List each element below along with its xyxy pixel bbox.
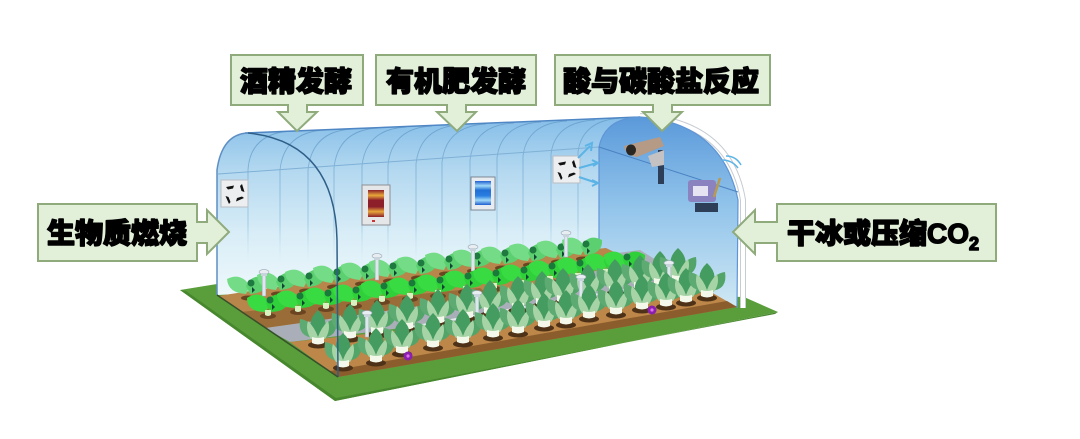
back row of bright plants xyxy=(227,238,602,300)
callout: acid and carbonate reaction xyxy=(555,55,770,131)
front row of pale plants xyxy=(325,263,725,372)
icon: wireless sensor xyxy=(688,156,741,212)
icon: fan airflow arrows xyxy=(578,143,598,186)
icon: left fan xyxy=(221,180,248,207)
ribs of tunnel xyxy=(248,118,620,265)
callout: acid and carbonate reaction: 酸与碳酸盐反应 xyxy=(563,65,759,97)
ground xyxy=(180,284,778,401)
soil beds and path xyxy=(263,250,705,342)
callout: dry ice or compressed CO2: 干冰或压缩CO xyxy=(787,218,969,249)
sprinklers back xyxy=(259,231,571,296)
sprinklers front xyxy=(362,261,674,337)
back end wall xyxy=(599,117,738,307)
icon: blue panel xyxy=(471,177,495,210)
callout: biomass burning: 生物质燃烧 xyxy=(47,217,187,249)
white end rim xyxy=(640,116,743,308)
callout: alcohol fermentation xyxy=(231,55,363,131)
purple markers xyxy=(404,306,656,360)
callout: organic fertilizer fermentation xyxy=(376,55,536,131)
front arch xyxy=(217,133,338,377)
greenhouse scene xyxy=(180,116,778,401)
icon: right fan xyxy=(553,156,580,183)
second row of pale plants xyxy=(300,248,696,348)
front row of bright plants xyxy=(247,251,645,319)
icon: camera xyxy=(624,137,664,184)
far wall of tunnel xyxy=(217,117,640,295)
callout: organic fertilizer fermentation: 有机肥发酵 xyxy=(386,65,526,97)
icon: heater xyxy=(362,185,390,225)
callout: alcohol fermentation: 酒精发酵 xyxy=(240,65,352,97)
callout: biomass burning xyxy=(38,204,229,261)
callout: dry ice or compressed CO2: 2 xyxy=(969,234,979,254)
callout: dry ice or compressed CO2 xyxy=(733,204,996,261)
